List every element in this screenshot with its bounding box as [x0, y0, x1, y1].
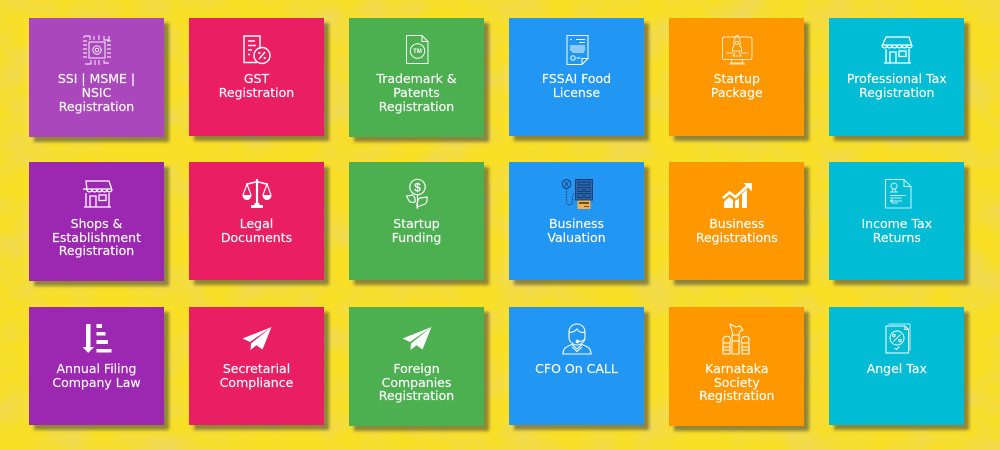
label: Trademark & [376, 71, 457, 86]
icon: trademark document: TM [413, 49, 421, 55]
label: License [553, 85, 600, 100]
icon: circuit chip [83, 35, 111, 65]
card: Business Valuation [509, 162, 644, 280]
label: Registration [859, 85, 934, 100]
label [376, 71, 457, 114]
card: GST Registration [189, 18, 324, 136]
card: Legal Documents [189, 162, 324, 280]
icon: storefront [83, 180, 113, 208]
card: Foreign Companies Registration [349, 307, 484, 426]
label: Patents [393, 85, 440, 100]
card: Trademark and Patents Registration [349, 18, 484, 137]
card: Annual Filing Company Law [29, 307, 164, 425]
label: Registration [59, 243, 134, 258]
card: Shops and Establishment Registration [29, 162, 164, 281]
icon: money plant [406, 178, 428, 209]
label: Secretarial [223, 361, 290, 376]
label [547, 216, 606, 244]
card: Business Registrations [669, 162, 804, 280]
label: Foreign [393, 361, 440, 376]
label: Shops & [71, 216, 122, 231]
icon: paper plane [402, 327, 432, 350]
icon: descending sort [82, 324, 112, 353]
icon: storefront [881, 36, 913, 64]
label [221, 216, 292, 244]
label: Business [549, 216, 604, 231]
label: Compliance [220, 374, 293, 390]
label: Package [711, 85, 763, 100]
label: GST [244, 71, 269, 86]
label: Legal [240, 216, 273, 231]
label: Income Tax [862, 216, 932, 231]
icon: balance scales [242, 179, 272, 208]
icon: document with percent [243, 35, 271, 64]
label [862, 216, 932, 244]
label: Company Law [52, 374, 141, 390]
label: NSIC [82, 85, 111, 100]
label: Companies [382, 374, 451, 390]
card: Startup Package [669, 18, 804, 136]
label [847, 71, 947, 100]
label: Registration [59, 99, 134, 114]
icon: calculator and tax card [562, 179, 593, 209]
label: Business [709, 216, 764, 231]
label [696, 216, 778, 245]
label: Registration [379, 99, 454, 114]
card: Karnataka Society Registration [669, 307, 804, 426]
label: Valuation [547, 230, 606, 244]
label: Angel Tax [867, 361, 927, 376]
icon: trademark document [406, 35, 428, 64]
label [711, 71, 763, 100]
card: Secretarial Compliance [189, 307, 324, 425]
label: CFO On CALL [535, 361, 618, 376]
label: Annual Filing [56, 361, 136, 376]
icon: licence document [566, 35, 588, 65]
label: Registration [219, 85, 294, 100]
icon: money plant: $ [414, 180, 421, 194]
label [542, 71, 611, 100]
label: Documents [221, 230, 292, 244]
label: Registration [379, 388, 454, 403]
icon: tax document [884, 179, 912, 208]
label [220, 361, 293, 390]
icon: rising bar chart [722, 183, 752, 208]
icon: percent document [886, 324, 910, 354]
label: Society [714, 374, 760, 390]
label [52, 361, 141, 390]
label: Karnataka [705, 361, 768, 376]
label: Funding [392, 230, 441, 244]
label [58, 71, 135, 114]
icon: raised fists [722, 323, 750, 354]
label [379, 361, 454, 403]
label [699, 361, 774, 403]
label: Registrations [696, 230, 778, 244]
card: FSSAI Food License [509, 18, 644, 136]
label: Professional Tax [847, 71, 947, 86]
card: SSI MSME NSIC Registration [29, 18, 164, 137]
icon: paper plane [242, 327, 272, 350]
icon: call agent [562, 324, 592, 354]
label [52, 216, 141, 258]
card: Income Tax Returns [829, 162, 964, 280]
label: Establishment [52, 230, 141, 244]
label: Startup [714, 71, 760, 86]
label: SSI | MSME | [58, 71, 135, 86]
label: Returns [873, 230, 921, 244]
card: Startup Funding [349, 162, 484, 280]
card: Professional Tax Registration [829, 18, 964, 136]
card: CFO On CALL [509, 307, 644, 425]
label [219, 71, 294, 100]
card: Angel Tax [829, 307, 964, 425]
icon: rocket on monitor [722, 34, 752, 64]
label: Registration [699, 388, 774, 403]
label: Startup [393, 216, 440, 231]
label: FSSAI Food [542, 71, 611, 86]
label [392, 216, 441, 245]
